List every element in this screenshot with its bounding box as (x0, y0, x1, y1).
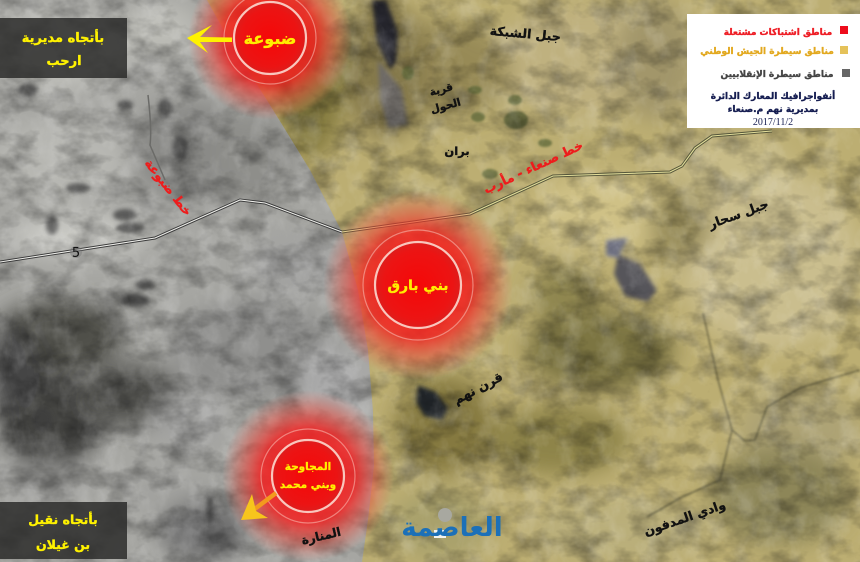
clash zone: Al-Majawiha and Bani Mohammed (222, 390, 394, 562)
panel: direction Arhab: بأتجاه مديرية (22, 29, 104, 46)
olive terrain masses (490, 5, 670, 115)
legend: title and date: بمديرية نهم م.صنعاء (728, 105, 818, 115)
label: Jabal Al-Shabaka: جبل الشبكة (489, 23, 562, 44)
label: Sanaa-Marib line: خط صنعاء - مأرب (480, 136, 585, 197)
clash zone: Al-Majawiha and Bani Mohammed: المجاوحة (285, 461, 331, 473)
panel: direction Arhab (0, 18, 127, 78)
label: Al-Manara: المنارة (300, 525, 342, 547)
legend: title and date: أنفواجرافيك المعارك الدائرة (711, 90, 835, 102)
clash zone: Bani Bariq (323, 190, 513, 380)
label: Wadi Al-Madfoun: وادي المدفون (642, 497, 727, 539)
legend: coup forces control: مناطق سيطرة الإنقلابيين (720, 70, 834, 80)
road: main highway (0, 131, 772, 262)
wadi channel (647, 313, 860, 517)
panel: direction Arhab: ارحب (46, 54, 82, 69)
clash zone: Dhabu'a: ضبوعة (244, 29, 296, 48)
label: Al-Hawl village: قرية (428, 81, 454, 99)
label: Biran: بران (444, 144, 470, 158)
dark mountain patches (372, 0, 657, 420)
dark settlement speckles (18, 84, 213, 524)
panel: direction Nuqayl: بأتجاه نقيل (28, 511, 98, 527)
legend: title and date (711, 90, 835, 128)
clash zone: Al-Majawiha and Bani Mohammed: وبني محمد (280, 479, 336, 491)
clash zone: Bani Bariq: بني بارق (387, 278, 449, 294)
legend: active clashes: مناطق اشتباكات مشتعلة (724, 28, 832, 38)
grayscale terrain side (0, 0, 400, 562)
arrow: toward Nuqayl Bin Ghaylan (241, 493, 276, 520)
legend: title and date: 2017/11/2 (753, 117, 793, 128)
label: Al-Hawl village: الحول (429, 97, 462, 116)
road number 5: 5 (72, 246, 80, 261)
village vegetation (402, 66, 552, 179)
arrow: toward Arhab (187, 25, 232, 53)
label: Jabal Sahar: جبل سحار (705, 196, 771, 232)
road number 5 (70, 246, 82, 261)
clash zone: Dhabu'a (188, 0, 352, 120)
logo: Al-Asima: العاصمة (401, 513, 503, 543)
legend panel (687, 14, 860, 128)
label: Qarn Nihm: قرن نهم (451, 369, 505, 407)
label: Dhabu'a line: خط ضبوعة (142, 156, 195, 219)
panel: direction Nuqayl: بن غيلان (36, 537, 90, 552)
legend: national army control: مناطق سيطرة الجيش الوطني (700, 47, 834, 57)
panel: direction Nuqayl (0, 502, 127, 559)
label: Al-Hawl village (425, 80, 462, 116)
